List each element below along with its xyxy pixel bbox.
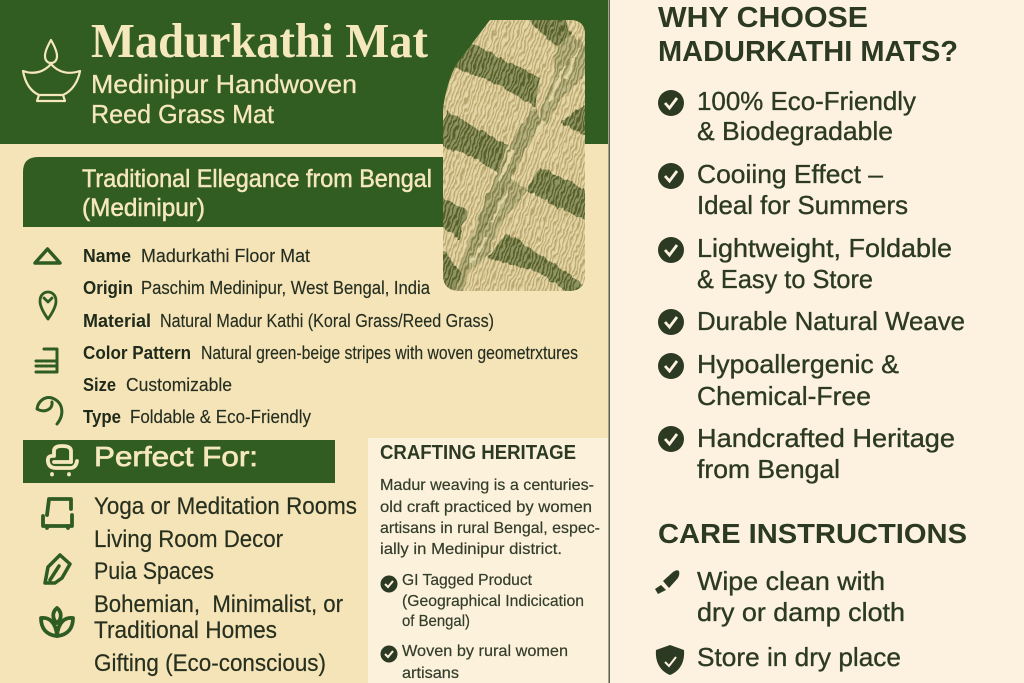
- label: name: Madurkathi Floor Mat: [141, 246, 310, 266]
- icon: shield: [656, 645, 684, 675]
- background: right panel: [610, 0, 1024, 683]
- bullet: gi tagged: of Bengal): [402, 613, 470, 630]
- bullet: woven: Woven by rural women: [402, 643, 568, 660]
- care: wipe clean: Wipe clean with: [697, 566, 885, 596]
- care: store dry: Store in dry place: [697, 642, 901, 672]
- heading: why choose: [658, 2, 958, 68]
- benefit: cooling: Cooiing Effect –: [697, 159, 884, 189]
- label: origin: Origin: [83, 278, 133, 298]
- bullet: gi tagged: GI Tagged Product: [402, 572, 533, 589]
- banner: traditional elegance: (Medinipur): [82, 194, 205, 222]
- heading: why choose: WHY CHOOSE: [658, 2, 868, 34]
- list item: homes: Bohemian, Minimalist, or: [94, 591, 343, 618]
- benefit: heritage: from Bengal: [697, 454, 840, 484]
- heading: CRAFTING HERITAGE: [380, 442, 576, 464]
- subtitle: [91, 69, 357, 129]
- benefit: durable: Durable Natural Weave: [697, 306, 965, 336]
- subtitle: Medinipur Handwoven: [91, 69, 357, 99]
- banner: traditional elegance: [23, 157, 450, 227]
- banner: perfect for: [23, 440, 335, 483]
- paragraph: ially in Medinipur district.: [380, 541, 562, 558]
- benefit: eco friendly: & Biodegradable: [697, 116, 893, 146]
- benefit: lightweight: Lightweight, Foldable: [697, 233, 952, 263]
- paragraph: artisans in rural Bengal, espec-: [380, 520, 600, 537]
- icon: check: [658, 237, 684, 263]
- icon: check: [658, 90, 684, 116]
- list item: puja: Puia Spaces: [94, 558, 214, 585]
- icon: check: [380, 646, 398, 662]
- benefit: lightweight: [697, 233, 952, 294]
- heading: why choose: MADURKATHI MATS?: [658, 36, 958, 68]
- benefit: eco friendly: 100% Eco-Friendly: [697, 86, 916, 116]
- list item: homes: Traditional Homes: [94, 617, 277, 644]
- label: type: Foldable & Eco-Friendly: [130, 407, 311, 427]
- benefit: eco friendly: [697, 86, 916, 146]
- list item: homes: [94, 591, 343, 644]
- care: wipe clean: dry or damp cloth: [697, 597, 905, 627]
- label: color pattern: Color Pattern: [83, 343, 191, 363]
- benefit: hypoallergenic: Chemical-Free: [697, 381, 871, 411]
- icon: leaf outline: [45, 555, 70, 583]
- heading: care instructions: CARE INSTRUCTIONS: [658, 518, 967, 549]
- bullet: woven: artisans: [402, 665, 459, 682]
- icon: check: [658, 353, 684, 379]
- list item: gifting: Gifting (Eco-conscious): [94, 650, 326, 677]
- panel: crafting heritage: [368, 438, 608, 683]
- icon: lotus: [41, 608, 73, 636]
- background: left panel: [0, 0, 610, 683]
- bullet: gi tagged: (Geographical Indicication: [402, 593, 584, 610]
- label: size: [83, 375, 232, 395]
- care: wipe clean: [697, 566, 905, 627]
- woven mat image: [443, 20, 585, 291]
- list item: yoga: Yoga or Meditation Rooms: [94, 493, 357, 520]
- subtitle: Reed Grass Mat: [91, 99, 275, 129]
- benefit: hypoallergenic: Hypoallergenic &: [697, 349, 899, 379]
- label: origin: Paschim Medinipur, West Bengal, India: [141, 278, 431, 298]
- benefit: cooling: [697, 159, 908, 220]
- icon: triangle: [35, 249, 60, 263]
- banner: traditional elegance: Traditional Ellegance from Bengal: [82, 165, 432, 193]
- label: size: Customizable: [126, 375, 232, 395]
- header band: [0, 0, 608, 144]
- icon: armchair: [43, 499, 72, 528]
- benefit: heritage: Handcrafted Heritage: [697, 423, 955, 453]
- icon: armchair light: [48, 446, 77, 474]
- benefit: lightweight: & Easy to Store: [697, 264, 873, 294]
- icon: check: [380, 576, 398, 592]
- list item: living room: Living Room Decor: [94, 526, 283, 553]
- label: size: Size: [83, 375, 116, 395]
- label: type: Type: [83, 407, 121, 427]
- paragraph: [380, 477, 600, 558]
- paragraph: Madur weaving is a centuries-: [380, 477, 594, 494]
- icon: oil lamp: [23, 40, 80, 101]
- benefit: hypoallergenic: [697, 349, 899, 411]
- paragraph: old craft practiced by women: [380, 499, 592, 516]
- icon: leaf: [37, 398, 62, 424]
- label: name: Name: [83, 246, 131, 266]
- label: color pattern: [83, 343, 578, 363]
- label: material: Natural Madur Kathi (Koral Grass/Reed Grass): [160, 311, 494, 331]
- icon: pattern: [36, 349, 57, 372]
- label: material: Material: [83, 311, 151, 331]
- divider line: [608, 0, 610, 683]
- icon: brush: [655, 570, 679, 594]
- title: Madurkathi Mat: [91, 13, 429, 68]
- icon: location pin: [40, 292, 56, 319]
- bullet: gi tagged: [402, 572, 584, 630]
- benefit: heritage: [697, 423, 955, 484]
- icon: check: [658, 426, 684, 452]
- benefit: cooling: Ideal for Summers: [697, 190, 908, 220]
- banner: perfect for: Perfect For:: [94, 441, 258, 472]
- icon: check: [658, 309, 684, 335]
- label: color pattern: Natural green-beige stripes with woven geometrxtures: [201, 343, 578, 363]
- icon: check: [658, 163, 684, 189]
- bullet: woven: [402, 643, 568, 682]
